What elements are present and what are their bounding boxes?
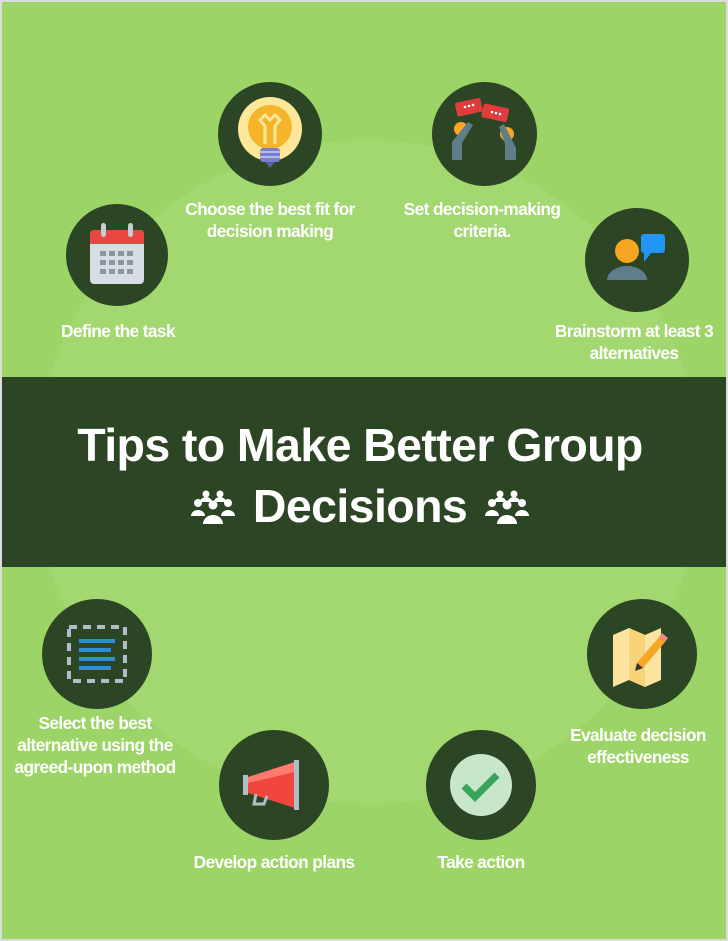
step 2 label: Choose the best fit for bbox=[185, 199, 355, 219]
step 4 icon: person with speech bubble bbox=[585, 208, 689, 312]
step 5 icon: selection list bbox=[42, 599, 152, 709]
step 6 label: Develop action plans bbox=[194, 852, 354, 872]
step 5 label bbox=[14, 713, 176, 777]
step 7 icon: check bbox=[426, 730, 536, 840]
title line 2 with group icons bbox=[191, 480, 529, 532]
step 2 icon: light bulb bbox=[218, 82, 322, 186]
step 2 label bbox=[185, 199, 356, 241]
step 4 label bbox=[555, 321, 714, 363]
step 7 label: Take action bbox=[437, 852, 525, 872]
title line 2 with group icons: Decisions bbox=[253, 480, 467, 532]
step 8 label bbox=[570, 725, 706, 767]
step 5 label: Select the best bbox=[38, 713, 151, 733]
step 2 label: decision making bbox=[207, 221, 333, 241]
title banner bbox=[2, 377, 726, 567]
step 6 icon: megaphone bbox=[219, 730, 329, 840]
title line 1: Tips to Make Better Group bbox=[77, 419, 643, 471]
step 3 icon: voting people bbox=[432, 82, 537, 186]
step 8 label: Evaluate decision bbox=[570, 725, 706, 745]
step 5 label: alternative using the bbox=[17, 735, 173, 755]
step 1 icon: calendar bbox=[66, 204, 168, 306]
step 5 label: agreed-upon method bbox=[14, 757, 176, 777]
step 3 label: Set decision-making bbox=[404, 199, 560, 219]
step 8 label: effectiveness bbox=[587, 747, 689, 767]
step 3 label bbox=[404, 199, 560, 241]
step 1 label: Define the task bbox=[61, 321, 175, 341]
background big circle bbox=[36, 140, 700, 804]
step 3 label: criteria. bbox=[453, 221, 511, 241]
step 8 icon: map with pencil bbox=[587, 599, 697, 709]
step 4 label: Brainstorm at least 3 bbox=[555, 321, 713, 341]
step 4 label: alternatives bbox=[590, 343, 678, 363]
